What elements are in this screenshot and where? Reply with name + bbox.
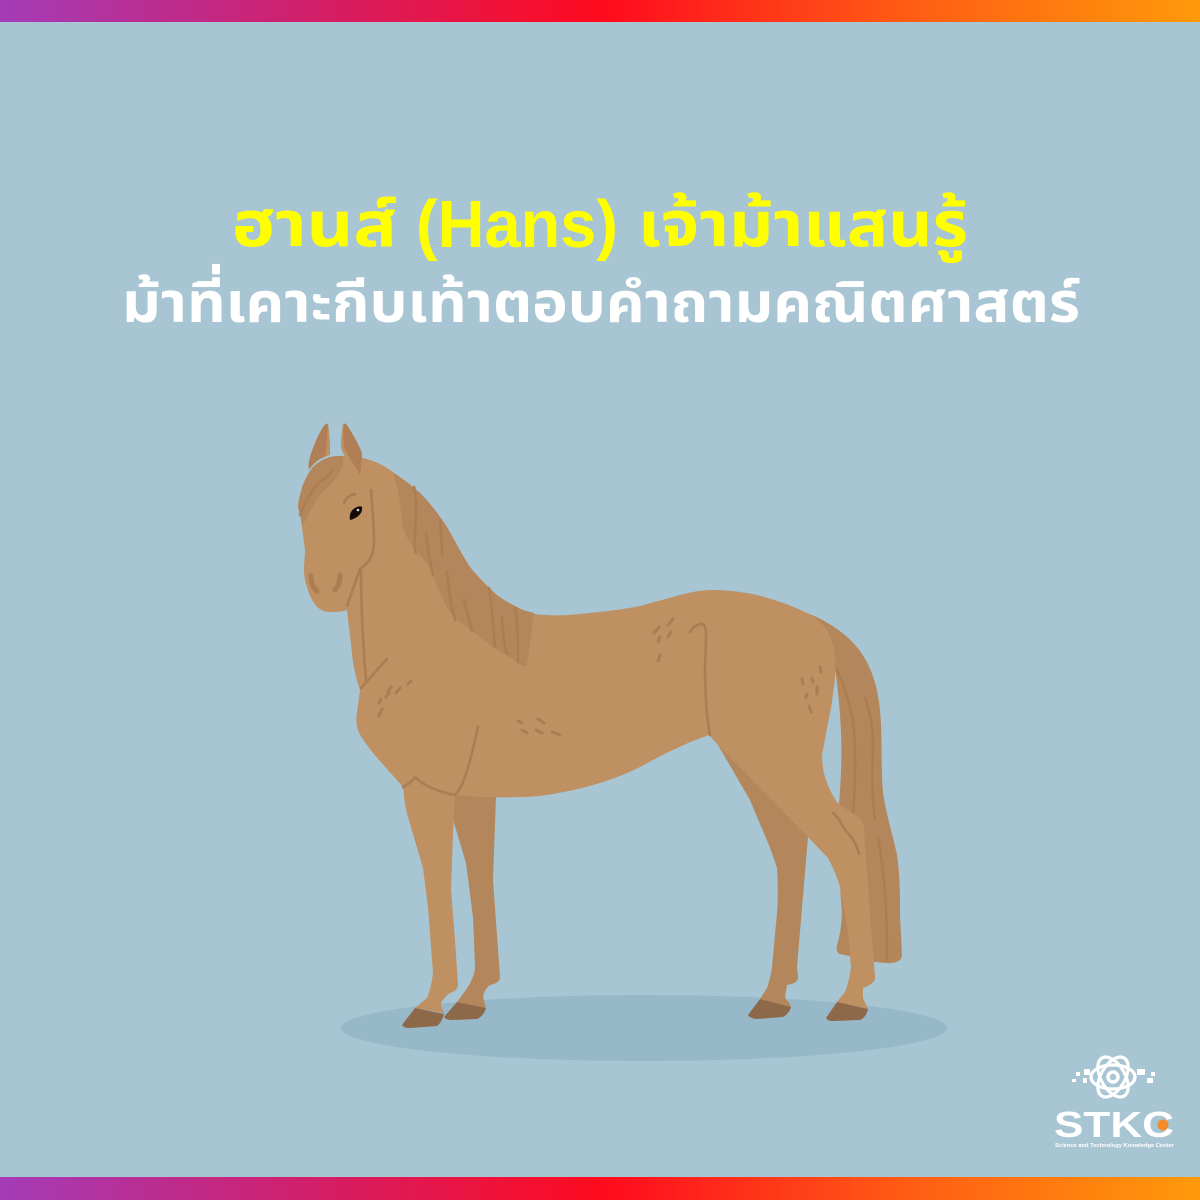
hoof near front [402, 1008, 444, 1028]
tail [807, 613, 902, 963]
title: (Hans) [416, 187, 618, 262]
logo: STKC [1054, 1052, 1175, 1149]
logo atom icon [1091, 1052, 1135, 1102]
coat speckles [379, 619, 821, 735]
forelock [298, 456, 343, 525]
ears [309, 424, 362, 475]
subtitle: ม้าที่เคาะกีบเท้าตอบคำถามคณิตศาสตร์ [122, 263, 1080, 334]
bottom gradient bar [0, 1177, 1200, 1200]
mane [393, 473, 534, 666]
face and body contour lines [311, 490, 859, 854]
logo wordmark: STKC [1054, 1104, 1174, 1145]
logo tagline: Science and Technology Knowledge Center [1055, 1143, 1175, 1149]
body, head and near legs [300, 456, 875, 1013]
hoof far front [444, 1002, 486, 1020]
hind leg shadow sliver [840, 887, 850, 956]
near hoof hind [826, 1002, 868, 1021]
horse illustration [298, 424, 902, 1028]
title: เจ้าม้าแสนรู้ [638, 190, 968, 263]
title: ฮานส์ [232, 190, 397, 260]
ground shadow [341, 995, 947, 1061]
title [232, 187, 968, 263]
near hoof back [748, 999, 791, 1019]
logo orange dot [1158, 1120, 1168, 1130]
eye [350, 506, 362, 520]
logo pixel squares [1072, 1069, 1155, 1083]
far hind leg [718, 745, 808, 1007]
far front leg [450, 792, 500, 1008]
mane strands [414, 487, 518, 662]
top gradient bar [0, 0, 1200, 22]
